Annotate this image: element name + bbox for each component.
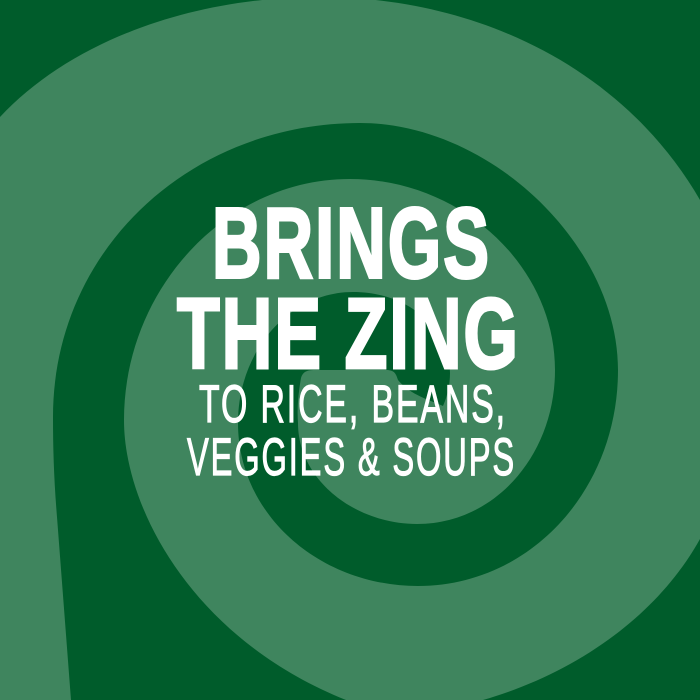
headline text [177,188,520,487]
spiral: inner dark band [53,123,618,700]
headline line: THE ZING: THE ZING [177,278,520,390]
subheading line: TO RICE, BEANS,: TO RICE, BEANS, [199,375,507,434]
headline line: BRINGS: BRINGS [212,188,491,300]
